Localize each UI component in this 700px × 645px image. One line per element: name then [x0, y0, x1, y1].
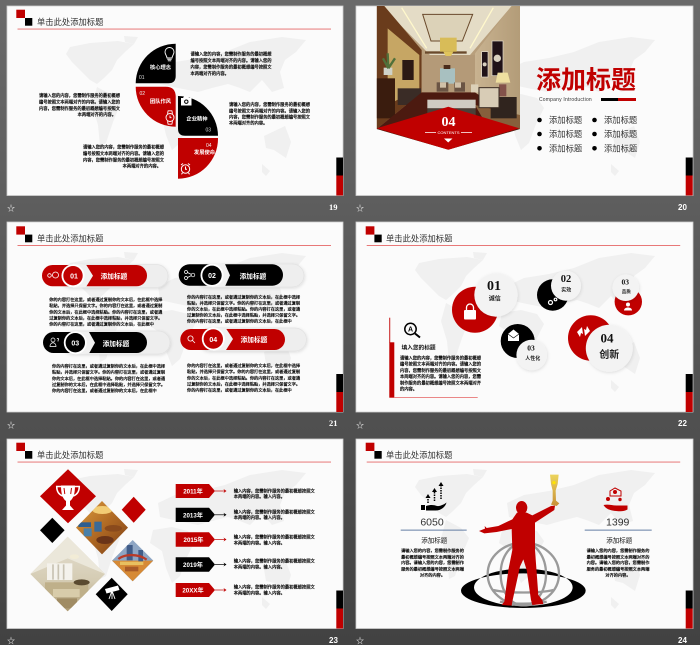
icon: alarm clock: [181, 164, 190, 174]
bullet list: 添加标题: [604, 144, 637, 154]
subtitle: Company Introduction: [539, 97, 592, 103]
text block 02: 你的内容打在这里，或者通过复制你的文本后，在此框中选择: [187, 293, 301, 300]
black quarter: core concept: [136, 44, 176, 83]
text block 02: 过复制你的文本后，在此框中选择粘贴，并选择只保留文字。: [187, 312, 300, 319]
text block right: 服务的最初概想编号按照文本两端: [587, 565, 649, 572]
footer star 19: ☆: [7, 204, 15, 213]
photo: interior room: [377, 6, 520, 150]
page number 22: 22: [678, 419, 687, 428]
text block: upper right: 内容，您需制作服务的最初概想编号按照文: [190, 64, 272, 70]
bubble 01: 01: [487, 279, 501, 294]
pill 01: 01: [70, 274, 78, 280]
panel: slide 19: [7, 6, 343, 196]
panel: slide 21: [7, 222, 343, 412]
red figure: [479, 501, 555, 606]
contents badge: [377, 107, 519, 150]
heading: 单击此处添加标题: [386, 234, 452, 244]
panel: slide 23: [7, 439, 343, 628]
callout text: 本两端对齐的内容。请输入您的内容，您需: [400, 373, 481, 380]
text block: right: 本两端对齐的内容。: [229, 120, 267, 127]
callout text: 的内容。: [400, 385, 417, 392]
text block: upper right: 请输入您的内容，您需制作服务的最初概想: [190, 50, 272, 58]
icon: gears: [548, 298, 557, 304]
side bar: [686, 374, 693, 412]
bubble 01: 诚信: [489, 294, 501, 302]
panel: slide 20: [356, 6, 693, 196]
text block 01: 你的内容打在这里，或者通过复制你的文本后，在此框中: [49, 320, 154, 328]
title: 添加标题: [536, 66, 636, 94]
icon: telescope: [105, 586, 120, 599]
timeline: 2013: 2013年: [183, 511, 203, 519]
icon: magnifier: A: [408, 326, 413, 334]
heading: 单击此处添加标题: [37, 234, 103, 244]
icon: person: [624, 302, 632, 310]
text block: right: 内容，您需制作服务的最初概想编号按照文: [229, 114, 311, 120]
page number 23: 23: [329, 636, 338, 645]
pill 02: [179, 263, 304, 288]
pill 01: [42, 264, 168, 288]
text block: upper right: 编号按照文本两端对齐的内容。请输入您的: [190, 57, 272, 64]
side bar: [336, 590, 343, 628]
pill 03: [43, 331, 170, 354]
bubble 03 small: [612, 274, 642, 315]
label right: 添加标题: [606, 536, 633, 544]
bullet list: [537, 115, 637, 154]
text block 04: 你的内容打在这里，或者通过复制你的文本后，在此框中: [187, 386, 292, 393]
text block: upper right: 本两端对齐的内容。: [190, 70, 229, 77]
text block 02: 粘贴，并选择只保留文字。你的内容打在这里，或者通过复制: [187, 299, 300, 306]
icon: hand with arrows: [421, 482, 446, 510]
diamond: trophy: [40, 469, 96, 523]
pill 03: 03: [71, 340, 79, 348]
bubble 04: [568, 315, 633, 372]
accent bar: [601, 98, 636, 101]
bubble 04: 创新: [599, 348, 619, 361]
callout heading: 填入您的标题: [402, 344, 436, 352]
bubble 02: [537, 271, 581, 311]
stat: 1399: 1399: [606, 516, 630, 528]
footer star 20: ☆: [356, 204, 364, 213]
black quarter: enterprise spirit: [178, 96, 218, 136]
bullet list: 添加标题: [604, 129, 637, 139]
diamond: small red: [122, 497, 146, 523]
diamond: small black: [40, 518, 65, 543]
text: 2019: 本两端的内容。输入内容。: [234, 564, 285, 571]
text: 20XX: 本两端的内容。输入内容。: [234, 590, 285, 597]
text: 2011: 本两端的内容。输入内容。: [234, 493, 285, 500]
text block: right: 编号按照文本两端对齐的内容。请输入您的: [229, 107, 310, 114]
text block left: 内容。请输入您的内容，您需制作: [401, 559, 465, 566]
callout text: 制作服务的最初概想编号按照文本两端对齐: [400, 379, 482, 386]
text: 2011: 输入内容，您需制作服务的最初概想按照文: [234, 487, 315, 494]
bubble 02: 实效: [561, 286, 571, 294]
text: 2013: 本两端的内容。输入内容。: [234, 514, 285, 521]
text block left: 最初概想编号按照文本两端对齐的: [401, 553, 464, 560]
bubble 02: 02: [561, 274, 571, 285]
text: 2019: 输入内容，您需制作服务的最初概想按照文: [234, 558, 315, 565]
callout bracket: [389, 318, 478, 398]
trophy cup: [550, 475, 559, 506]
text block 04: 粘贴，并选择只保留文字。你的内容打在这里，或者通过复制: [187, 368, 300, 375]
side bar: [336, 158, 343, 196]
text: 2013: 输入内容，您需制作服务的最初概想按照文: [234, 508, 315, 515]
text block: right: 请输入您的内容，您需制作服务的最初概想: [229, 101, 311, 108]
text block 02: 你的文本后，在此框中选择粘贴。你的内容打在这里，或者通: [187, 306, 301, 313]
red quarter: team style: [136, 87, 176, 127]
pill 04: 添加标题: [241, 335, 268, 344]
black quarter: core concept: 01: [139, 75, 145, 81]
header marks: [366, 443, 382, 459]
black quarter: enterprise spirit: 企业精神: [186, 114, 208, 122]
bubble 03 mail: [501, 324, 547, 370]
red quarter: development mission: 04: [206, 143, 212, 149]
text block left: 请输入您的内容，您需制作服务的: [401, 547, 464, 554]
timeline: 20XX: [176, 583, 315, 597]
pill 02: 02: [208, 273, 216, 280]
text block: left: 请输入您的内容，您需制作服务的最初概想: [39, 92, 121, 99]
globe: [488, 543, 559, 605]
bubble 03 small: 品质: [622, 288, 631, 295]
page number 21: 21: [329, 418, 338, 428]
heading: 单击此处添加标题: [37, 17, 103, 27]
icon: arrows: [577, 326, 590, 337]
label left: 添加标题: [421, 536, 448, 544]
bubble 04: 04: [600, 330, 614, 346]
heading: 单击此处添加标题: [37, 450, 103, 460]
text block 01: 粘贴，并选择只保留文字。你的内容打在这里，或者通过复制: [49, 302, 162, 309]
icon: hand with network: [604, 488, 628, 511]
globe and figure illustration: [461, 475, 586, 608]
header marks: [16, 10, 32, 26]
icon: network: [184, 270, 195, 280]
text block: lower left: 编号按照文本两端对齐的内容。请输入您的: [83, 150, 164, 157]
red quarter: development mission: [178, 138, 218, 179]
icon: people: [50, 338, 59, 346]
timeline: 2015: 2015年: [184, 536, 203, 544]
text block 02: 你的内容打在这里，或者通过复制你的文本后，在此框中: [187, 318, 292, 325]
side bar: [336, 374, 343, 412]
text block: lower left: 请输入您的内容，您需制作服务的最初概想: [83, 144, 165, 151]
page number 20: 20: [678, 203, 687, 212]
text block 01: 你的内容打在这里，或者通过复制你的文本后，在此框中选择: [49, 296, 163, 303]
pill 04: 04: [209, 337, 217, 344]
contents badge: 04: [442, 115, 456, 130]
text block 03: 过复制你的文本后，在此框中选择粘贴，并选择只保留文字。: [52, 381, 165, 388]
header marks: [16, 443, 32, 459]
callout text: 请输入您的内容，您需制作服务的最初概想: [400, 354, 482, 361]
text block 04: 你的文本后，在此框中选择粘贴。你的内容打在这里，或者通: [187, 374, 301, 381]
text block right: 请输入您的内容，您需制作服务的: [587, 547, 649, 554]
black quarter: core concept: 核心理念: [150, 63, 172, 71]
text: 20XX: 输入内容，您需制作服务的最初概想按照文: [234, 584, 315, 591]
black quarter: enterprise spirit: 03: [206, 128, 211, 134]
red quarter: team style: 02: [140, 91, 145, 97]
panel: slide 24: [356, 439, 693, 628]
icon: watch: [166, 111, 174, 124]
icon: magnifier: [405, 323, 420, 338]
text block 03: 你的内容打在这里，或者通过复制你的文本后，在此框中: [52, 387, 157, 394]
timeline: 2019: [176, 557, 315, 572]
panel: slide 22: [356, 222, 693, 412]
icon: camera: [181, 96, 192, 106]
icon: mail: [508, 330, 519, 341]
callout text: 内容，您需制作服务的最初概想编号按照文: [400, 367, 482, 374]
red quarter: development mission: 发展使命: [194, 148, 216, 156]
icon: trophy: [57, 486, 79, 510]
pill 02: 添加标题: [240, 272, 267, 280]
timeline: 2011: [176, 484, 315, 500]
text block: left: 本两端对齐的内容。: [78, 111, 116, 118]
timeline: 2019: 2019年: [183, 561, 203, 569]
text: 2015: 本两端的内容。输入内容。: [234, 539, 285, 546]
callout text: 编号按照文本两端对齐的内容。请输入您的: [400, 361, 481, 368]
diamond: telescope: [96, 578, 128, 611]
bubble 03 small: 03: [622, 278, 629, 286]
text block 04: 你的内容打在这里，或者通过复制你的文本后，在此框中选择: [187, 362, 301, 369]
photo: living room: [30, 536, 106, 612]
text: 2015: 输入内容，您需制作服务的最初概想按照文: [234, 533, 315, 540]
contents badge: CONTENTS: [438, 130, 460, 135]
text block: left: 内容，您需制作服务的最初概想编号按照文: [39, 105, 121, 112]
pill 03: 添加标题: [103, 339, 130, 348]
text block 03: 你的内容打在这里，或者通过复制你的文本后，在此框中选择: [52, 363, 166, 370]
text block: lower left: 本两端对齐的内容。: [123, 162, 161, 169]
side bar: [686, 158, 693, 196]
text block right: 最初概想编号按照文本两端对齐的: [587, 553, 649, 560]
pill 04: [180, 328, 306, 351]
icon: lock: [464, 304, 476, 320]
text block 04: 过复制你的文本后，在此框中选择粘贴，并选择只保留文字。: [187, 380, 300, 387]
text block left: 对齐的内容。: [420, 571, 445, 578]
text block right: 对齐的内容。: [605, 571, 631, 578]
icon: search: [188, 336, 195, 343]
timeline: 20XX: 20XX年: [182, 586, 204, 594]
bubble 03 mail: 03: [527, 344, 535, 352]
text block: lower left: 内容，您需制作服务的最初概想编号按照文: [83, 156, 165, 164]
text block left: 服务的最初概想编号按照文本两端: [401, 565, 464, 572]
header marks: [16, 226, 32, 242]
text block: left: 编号按照文本两端对齐的内容。请输入您的: [39, 98, 120, 106]
icon: bulb: [165, 48, 174, 61]
bullet list: 添加标题: [604, 115, 637, 125]
text block right: 内容。请输入您的内容，您需制作: [587, 559, 650, 566]
page number 19: 19: [329, 202, 338, 212]
icon: gears: [48, 272, 58, 278]
red quarter: team style: 团队作风: [150, 97, 172, 105]
heading: 单击此处添加标题: [386, 450, 452, 460]
bubble 03 mail: 人性化: [525, 355, 540, 362]
timeline: 2011: 2011年: [183, 488, 203, 496]
bullet list: 添加标题: [549, 129, 582, 139]
text block 03: 粘贴，并选择只保留文字。你的内容打在这里，或者通过复制: [52, 369, 165, 376]
text block 01: 过复制你的文本后，在此框中选择粘贴，并选择只保留文字。: [49, 314, 162, 322]
footer star 21: ☆: [7, 421, 15, 430]
header marks: [366, 226, 382, 242]
black ring: [461, 569, 586, 608]
text block 03: 你的文本后，在此框中选择粘贴。你的内容打在这里，或者通: [52, 375, 166, 382]
timeline: 2015: [176, 532, 315, 547]
bullet list: 添加标题: [549, 115, 582, 125]
bullet list: 添加标题: [549, 144, 582, 154]
pill 01: 添加标题: [101, 272, 128, 280]
stat: 6050: 6050: [420, 516, 444, 528]
photo: restaurant: [75, 500, 129, 555]
page number 24: 24: [678, 636, 687, 645]
bubble 01: [452, 273, 518, 333]
photo: tower bridge: [111, 539, 154, 582]
timeline: 2013: [176, 508, 315, 522]
side bar: [686, 590, 693, 628]
text block 01: 你的文本后，在此框中选择粘贴。你的内容打在这里，或者通: [49, 308, 163, 315]
footer star 22: ☆: [356, 421, 364, 430]
